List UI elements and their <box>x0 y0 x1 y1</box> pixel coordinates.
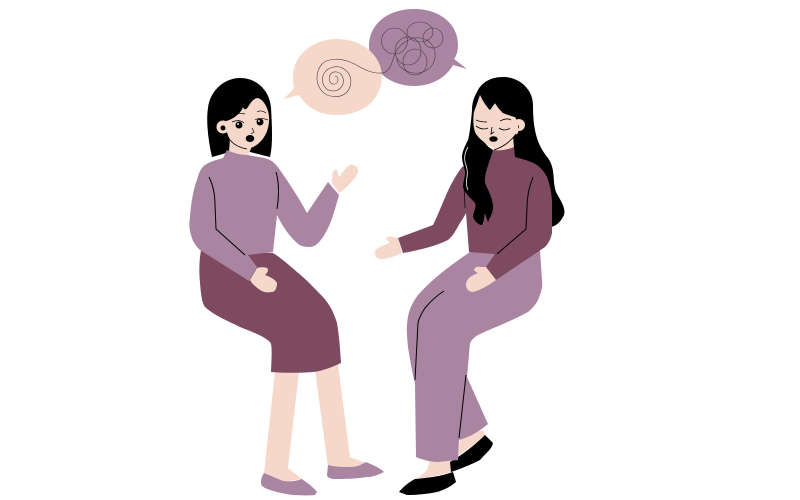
thought scribble linking spiral and tangle <box>317 22 443 97</box>
left woman legs <box>264 364 366 482</box>
left woman sweater fold lines <box>209 172 278 255</box>
speech bubble: tangled thoughts (purple) <box>369 9 467 86</box>
left woman lap hand <box>250 267 277 292</box>
figure: left woman <box>189 78 384 495</box>
left woman sweater <box>189 150 339 281</box>
left woman face <box>216 98 269 149</box>
left woman hair <box>207 78 272 157</box>
left woman raised hand <box>332 165 358 193</box>
speech bubble: spiral thought (pink) <box>284 39 382 115</box>
right woman face <box>473 95 525 150</box>
right woman back hair <box>480 77 564 227</box>
right woman sweater fold line <box>497 177 533 254</box>
right woman hair highlight strand <box>465 147 468 190</box>
figure: right woman <box>375 77 564 495</box>
right woman front hair lock <box>462 77 533 225</box>
right woman neck <box>493 135 514 152</box>
left woman skirt <box>199 250 341 373</box>
right woman lap hand <box>466 267 496 292</box>
right woman ankles <box>415 430 486 480</box>
right woman trouser fold lines <box>415 291 466 438</box>
left woman shoes <box>261 462 384 495</box>
right woman trousers <box>407 250 542 462</box>
left woman neck <box>229 138 252 156</box>
right woman shoes <box>399 435 493 495</box>
right woman sweater <box>398 147 552 280</box>
right woman reaching hand <box>375 236 402 259</box>
right woman outer hair strand <box>463 177 466 208</box>
